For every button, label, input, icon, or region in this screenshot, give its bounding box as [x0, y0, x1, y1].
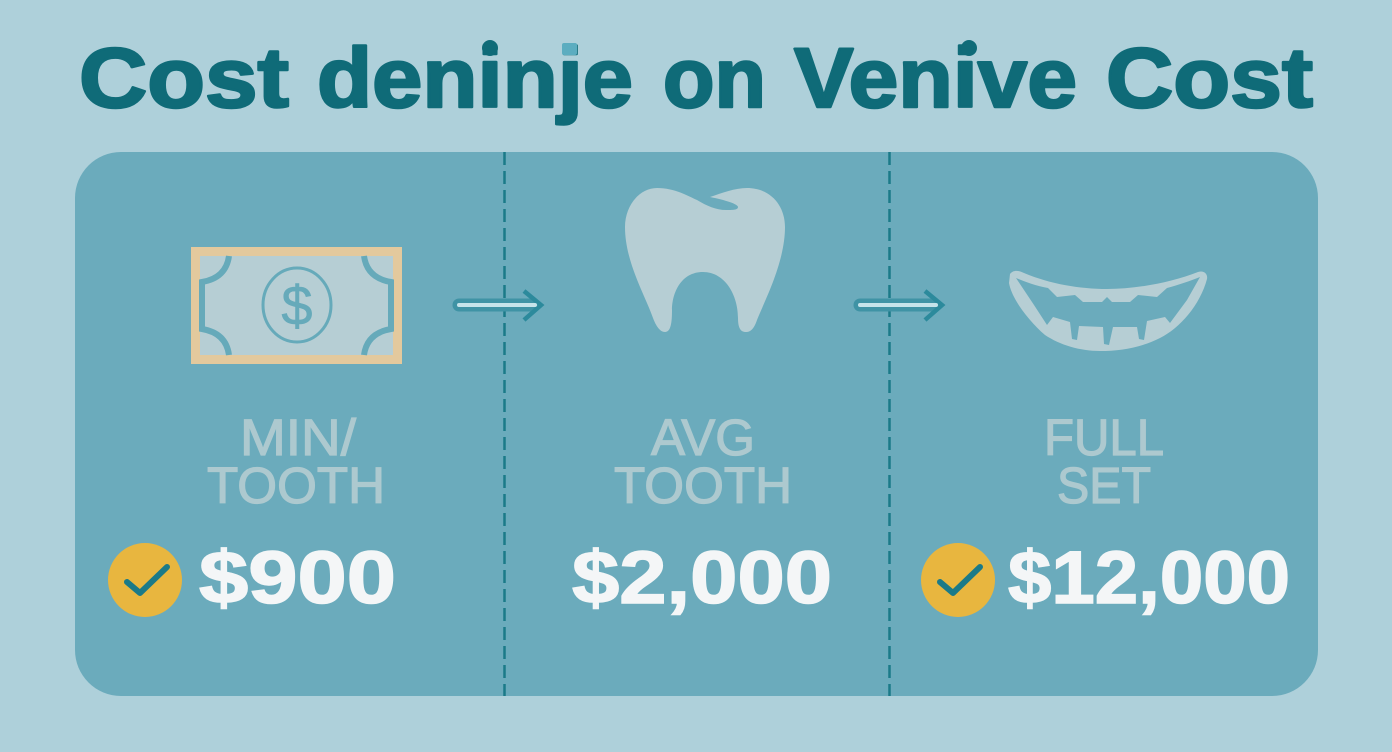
arrow: tooth to smile — [860, 291, 942, 320]
title: on — [663, 31, 766, 125]
icon: dollar bill — [191, 247, 402, 364]
icon: check badge full — [921, 543, 995, 617]
label: min per tooth: MIN/ — [240, 409, 357, 466]
label: full set — [1044, 409, 1164, 514]
label: average tooth: AVG — [651, 409, 755, 466]
label: average tooth — [614, 409, 792, 514]
icon: dollar bill: $ — [281, 274, 313, 337]
panel: cost comparison — [75, 152, 1318, 696]
arrow: bill to tooth — [459, 291, 541, 320]
label: min per tooth — [207, 409, 385, 514]
icon: check badge min — [108, 543, 182, 617]
price: full set: $12,000 — [1008, 536, 1290, 619]
label: average tooth: TOOTH — [614, 457, 792, 514]
label: min per tooth: TOOTH — [207, 457, 385, 514]
price: avg tooth: $2,000 — [572, 536, 832, 619]
title — [79, 31, 1313, 125]
label: full set: FULL — [1044, 409, 1164, 466]
title: deninje — [317, 31, 633, 125]
icon: smile with teeth — [1009, 271, 1207, 351]
title: Cost — [79, 31, 289, 125]
title: Venive — [794, 31, 1077, 125]
title: Cost — [1106, 31, 1313, 125]
icon: tooth — [625, 188, 785, 332]
label: full set: SET — [1057, 457, 1151, 514]
price: min tooth: $900 — [199, 536, 396, 619]
